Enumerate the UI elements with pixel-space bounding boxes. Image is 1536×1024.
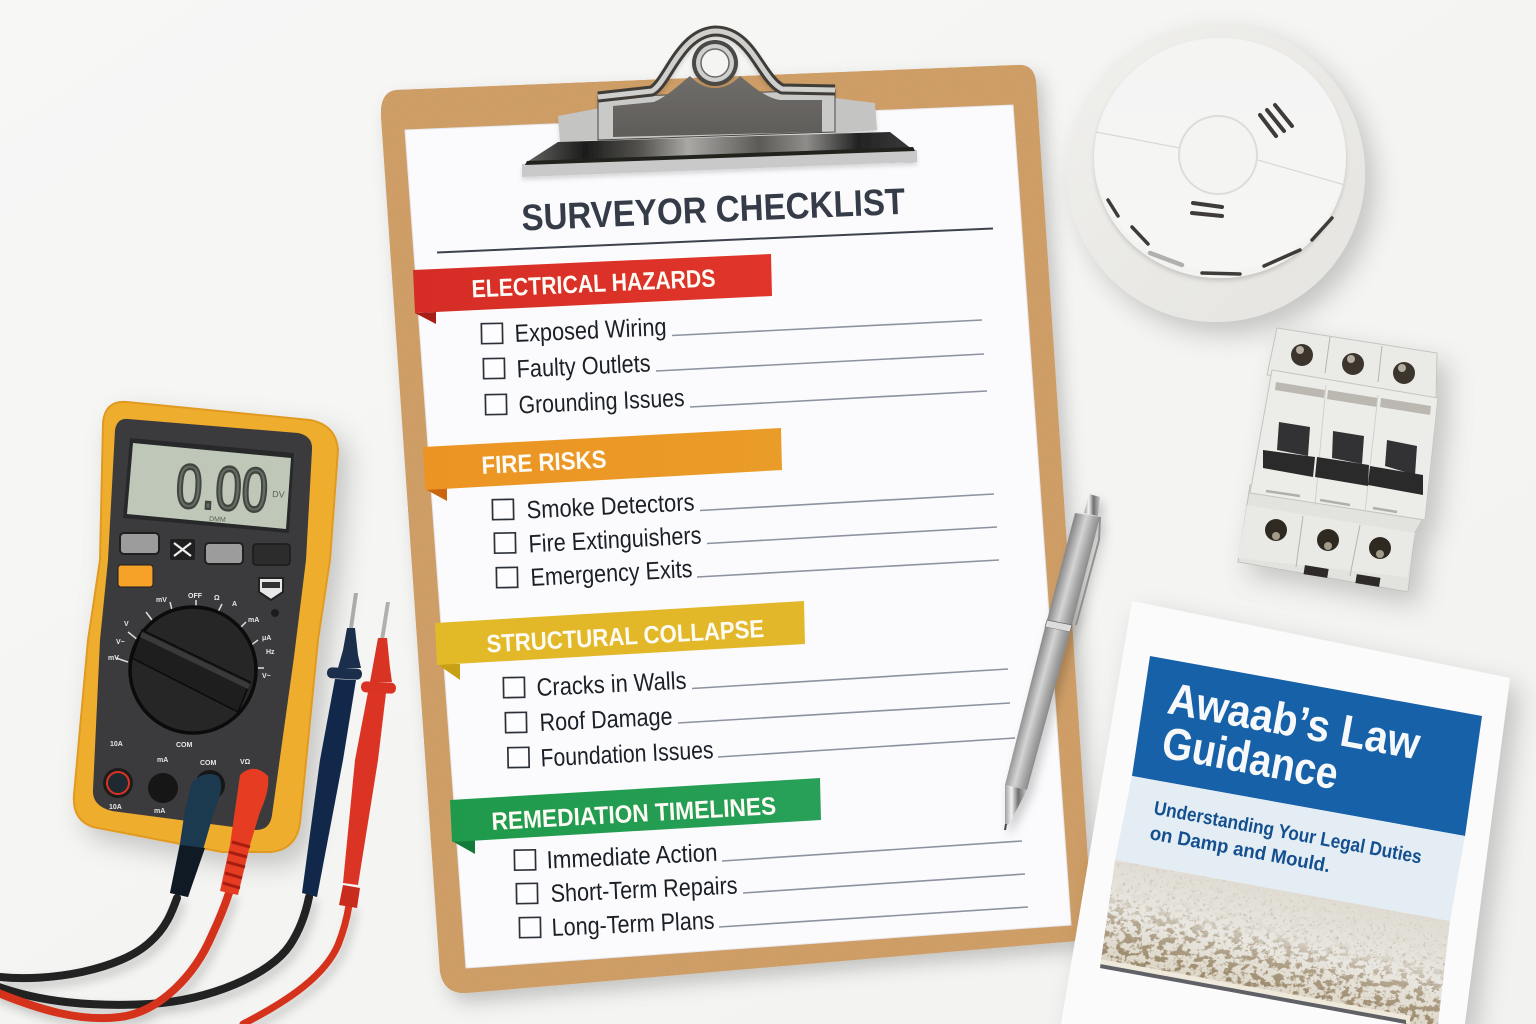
red probe — [339, 602, 396, 908]
checklist paper — [405, 105, 1071, 968]
dial labels: V~ — [116, 639, 125, 646]
item: immediate action — [514, 839, 1022, 874]
item: emergency exits — [496, 555, 999, 592]
circuit breaker — [1238, 328, 1438, 592]
dial labels: mV — [156, 597, 167, 604]
display — [123, 438, 294, 533]
item: grounding issues — [485, 384, 987, 419]
heading banner: fire risks: FIRE RISKS — [481, 445, 607, 480]
heading banner: remediation timelines — [450, 778, 821, 854]
switch body — [1250, 370, 1438, 520]
item: roof damage: Roof Damage — [539, 703, 673, 737]
dial labels: μA — [262, 635, 271, 642]
clipboard board — [381, 65, 1092, 993]
subtitle band — [1115, 776, 1465, 921]
dial labels: COM — [200, 760, 216, 767]
black probe — [302, 593, 362, 897]
item: long-term plans: Long-Term Plans — [551, 907, 715, 942]
dial labels: mA — [154, 808, 165, 815]
heading banner: structural collapse: STRUCTURAL COLLAPSE — [486, 615, 765, 658]
smoke detector — [1067, 24, 1365, 322]
item: foundation issues: Foundation Issues — [540, 736, 714, 772]
item: cracks in walls — [503, 667, 1008, 702]
multimeter — [74, 402, 338, 852]
red plug — [220, 769, 268, 895]
detector cover — [1094, 38, 1346, 278]
toggle switches — [1263, 422, 1423, 495]
buttons — [118, 533, 290, 617]
metal clip — [522, 31, 917, 177]
booklet subtitle: on Damp and Mould. — [1148, 822, 1332, 877]
dial labels: V — [124, 621, 129, 628]
test leads and probes — [0, 593, 396, 1024]
rotary dial — [130, 607, 256, 733]
blue title band — [1132, 656, 1482, 836]
item: emergency exits: Emergency Exits — [530, 555, 693, 592]
section: fire risks — [423, 428, 999, 592]
booklet page — [1060, 601, 1510, 1024]
dial labels: Hz — [266, 649, 275, 656]
mould photo — [1100, 860, 1450, 1024]
dial labels: COM — [176, 742, 192, 749]
clipboard — [381, 31, 1092, 993]
heading banner: fire risks — [423, 428, 782, 501]
booklet title: Awaab’s Law — [1164, 673, 1425, 769]
booklet subtitle: Understanding Your Legal Duties — [1152, 797, 1424, 869]
dial labels: mA — [157, 757, 168, 764]
dial labels: Ω — [214, 595, 220, 602]
pen — [1005, 494, 1100, 830]
dial labels: A — [232, 601, 237, 608]
item: grounding issues: Grounding Issues — [518, 384, 685, 419]
dial labels: OFF — [188, 593, 203, 600]
detector base — [1067, 24, 1365, 322]
dial labels: VΩ — [240, 759, 251, 766]
cables — [0, 893, 349, 1024]
item: fire extinguishers: Fire Extinguishers — [528, 521, 702, 558]
title: SURVEYOR CHECKLIST — [521, 181, 906, 238]
dial labels: mV — [108, 655, 119, 662]
bottom terminals — [1238, 485, 1425, 592]
item: roof damage — [505, 703, 1010, 737]
dial labels — [108, 593, 275, 815]
section: remediation timelines — [450, 778, 1028, 942]
input terminals — [103, 768, 225, 803]
item: exposed wiring: Exposed Wiring — [514, 313, 667, 348]
item: smoke detectors: Smoke Detectors — [526, 488, 695, 524]
item: smoke detectors — [492, 488, 994, 524]
top terminals — [1267, 328, 1437, 400]
item: short-term repairs — [516, 872, 1025, 908]
meter body — [74, 402, 338, 852]
heading banner: structural collapse — [435, 601, 805, 680]
booklet — [1060, 601, 1510, 1024]
item: faulty outlets: Faulty Outlets — [516, 349, 651, 383]
dial labels: V~ — [262, 673, 271, 680]
item: fire extinguishers — [494, 521, 997, 558]
dial labels: mA — [248, 617, 259, 624]
item: foundation issues — [508, 736, 1015, 772]
dial labels: 10A — [109, 804, 122, 811]
black plug — [170, 774, 221, 897]
item: faulty outlets — [483, 349, 984, 383]
display: DMM — [209, 516, 226, 524]
heading banner: remediation timelines: REMEDIATION TIMELINES — [491, 792, 777, 836]
item: cracks in walls: Cracks in Walls — [536, 667, 687, 702]
display: 0.00 — [174, 452, 270, 526]
item: short-term repairs: Short-Term Repairs — [550, 872, 738, 908]
vent slots — [1108, 105, 1332, 274]
heading banner: electrical hazards — [413, 254, 772, 324]
display: DV — [272, 489, 285, 500]
heading banner: electrical hazards: ELECTRICAL HAZARDS — [471, 264, 716, 303]
item: long-term plans — [519, 907, 1028, 942]
section: electrical hazards — [413, 254, 987, 419]
section: structural collapse — [435, 601, 1015, 772]
dial labels: 10A — [110, 741, 123, 748]
booklet title: Guidance — [1158, 717, 1342, 799]
item: immediate action: Immediate Action — [546, 839, 718, 874]
item: exposed wiring — [481, 313, 982, 348]
